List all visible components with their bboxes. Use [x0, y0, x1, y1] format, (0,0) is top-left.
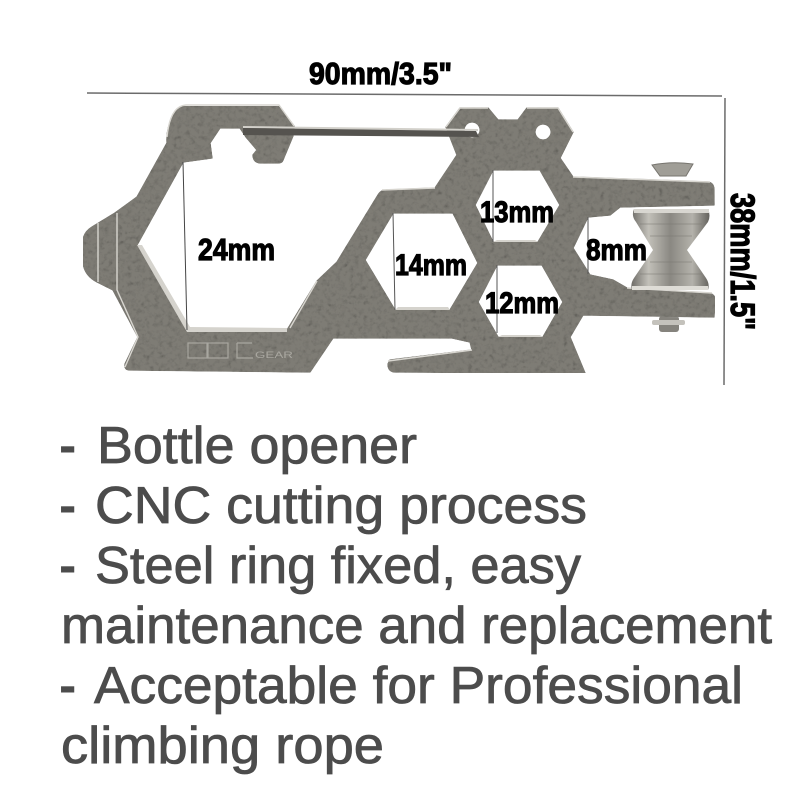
feature: steel ring line 1: - — [59, 537, 76, 595]
feature: climbing rope line 2: climbing rope — [61, 717, 384, 775]
tool body — [83, 106, 715, 373]
product: multi-tool carabiner — [83, 105, 715, 373]
bevel: main opening and hex sockets — [137, 240, 543, 337]
label: overall width: 90mm/3.5" — [309, 56, 452, 91]
label: 12mm hex: 12mm — [485, 287, 559, 320]
spring gate rod — [243, 126, 479, 137]
dimension lines — [87, 93, 725, 385]
12mm gauge line — [496, 265, 498, 333]
opening gauge line — [183, 162, 187, 330]
label: 13mm hex: 13mm — [480, 196, 554, 229]
8mm gauge line — [587, 217, 589, 274]
feature: steel ring line 2: maintenance and replacement — [61, 597, 773, 655]
height line — [724, 98, 725, 385]
feature: bottle opener: Bottle opener — [97, 417, 417, 475]
engraved logo — [188, 343, 294, 360]
engraved logo: GEAR — [255, 350, 294, 360]
body edge highlights — [98, 105, 712, 367]
dimension labels — [198, 56, 761, 330]
feature: CNC cutting: CNC cutting process — [95, 477, 587, 535]
label: main opening: 24mm — [198, 232, 275, 267]
14mm gauge line — [393, 213, 395, 310]
label: 8mm slot: 8mm — [586, 234, 647, 267]
feature: climbing rope line 1: - — [59, 657, 76, 715]
roller wheel — [631, 209, 710, 290]
screw: top of roller — [652, 163, 693, 176]
13mm gauge line — [492, 170, 494, 242]
label: overall height: 38mm/1.5" — [723, 193, 761, 330]
feature: CNC cutting: - — [59, 477, 76, 535]
feature: steel ring line 1: Steel ring fixed, easy — [95, 537, 581, 595]
feature: climbing rope line 1: Acceptable for Professional — [94, 657, 743, 715]
feature: bottle opener: - — [59, 417, 76, 475]
screw: bottom of roller — [652, 316, 685, 332]
width line — [87, 93, 722, 96]
label: 14mm hex: 14mm — [395, 249, 467, 282]
feature list — [59, 417, 773, 775]
